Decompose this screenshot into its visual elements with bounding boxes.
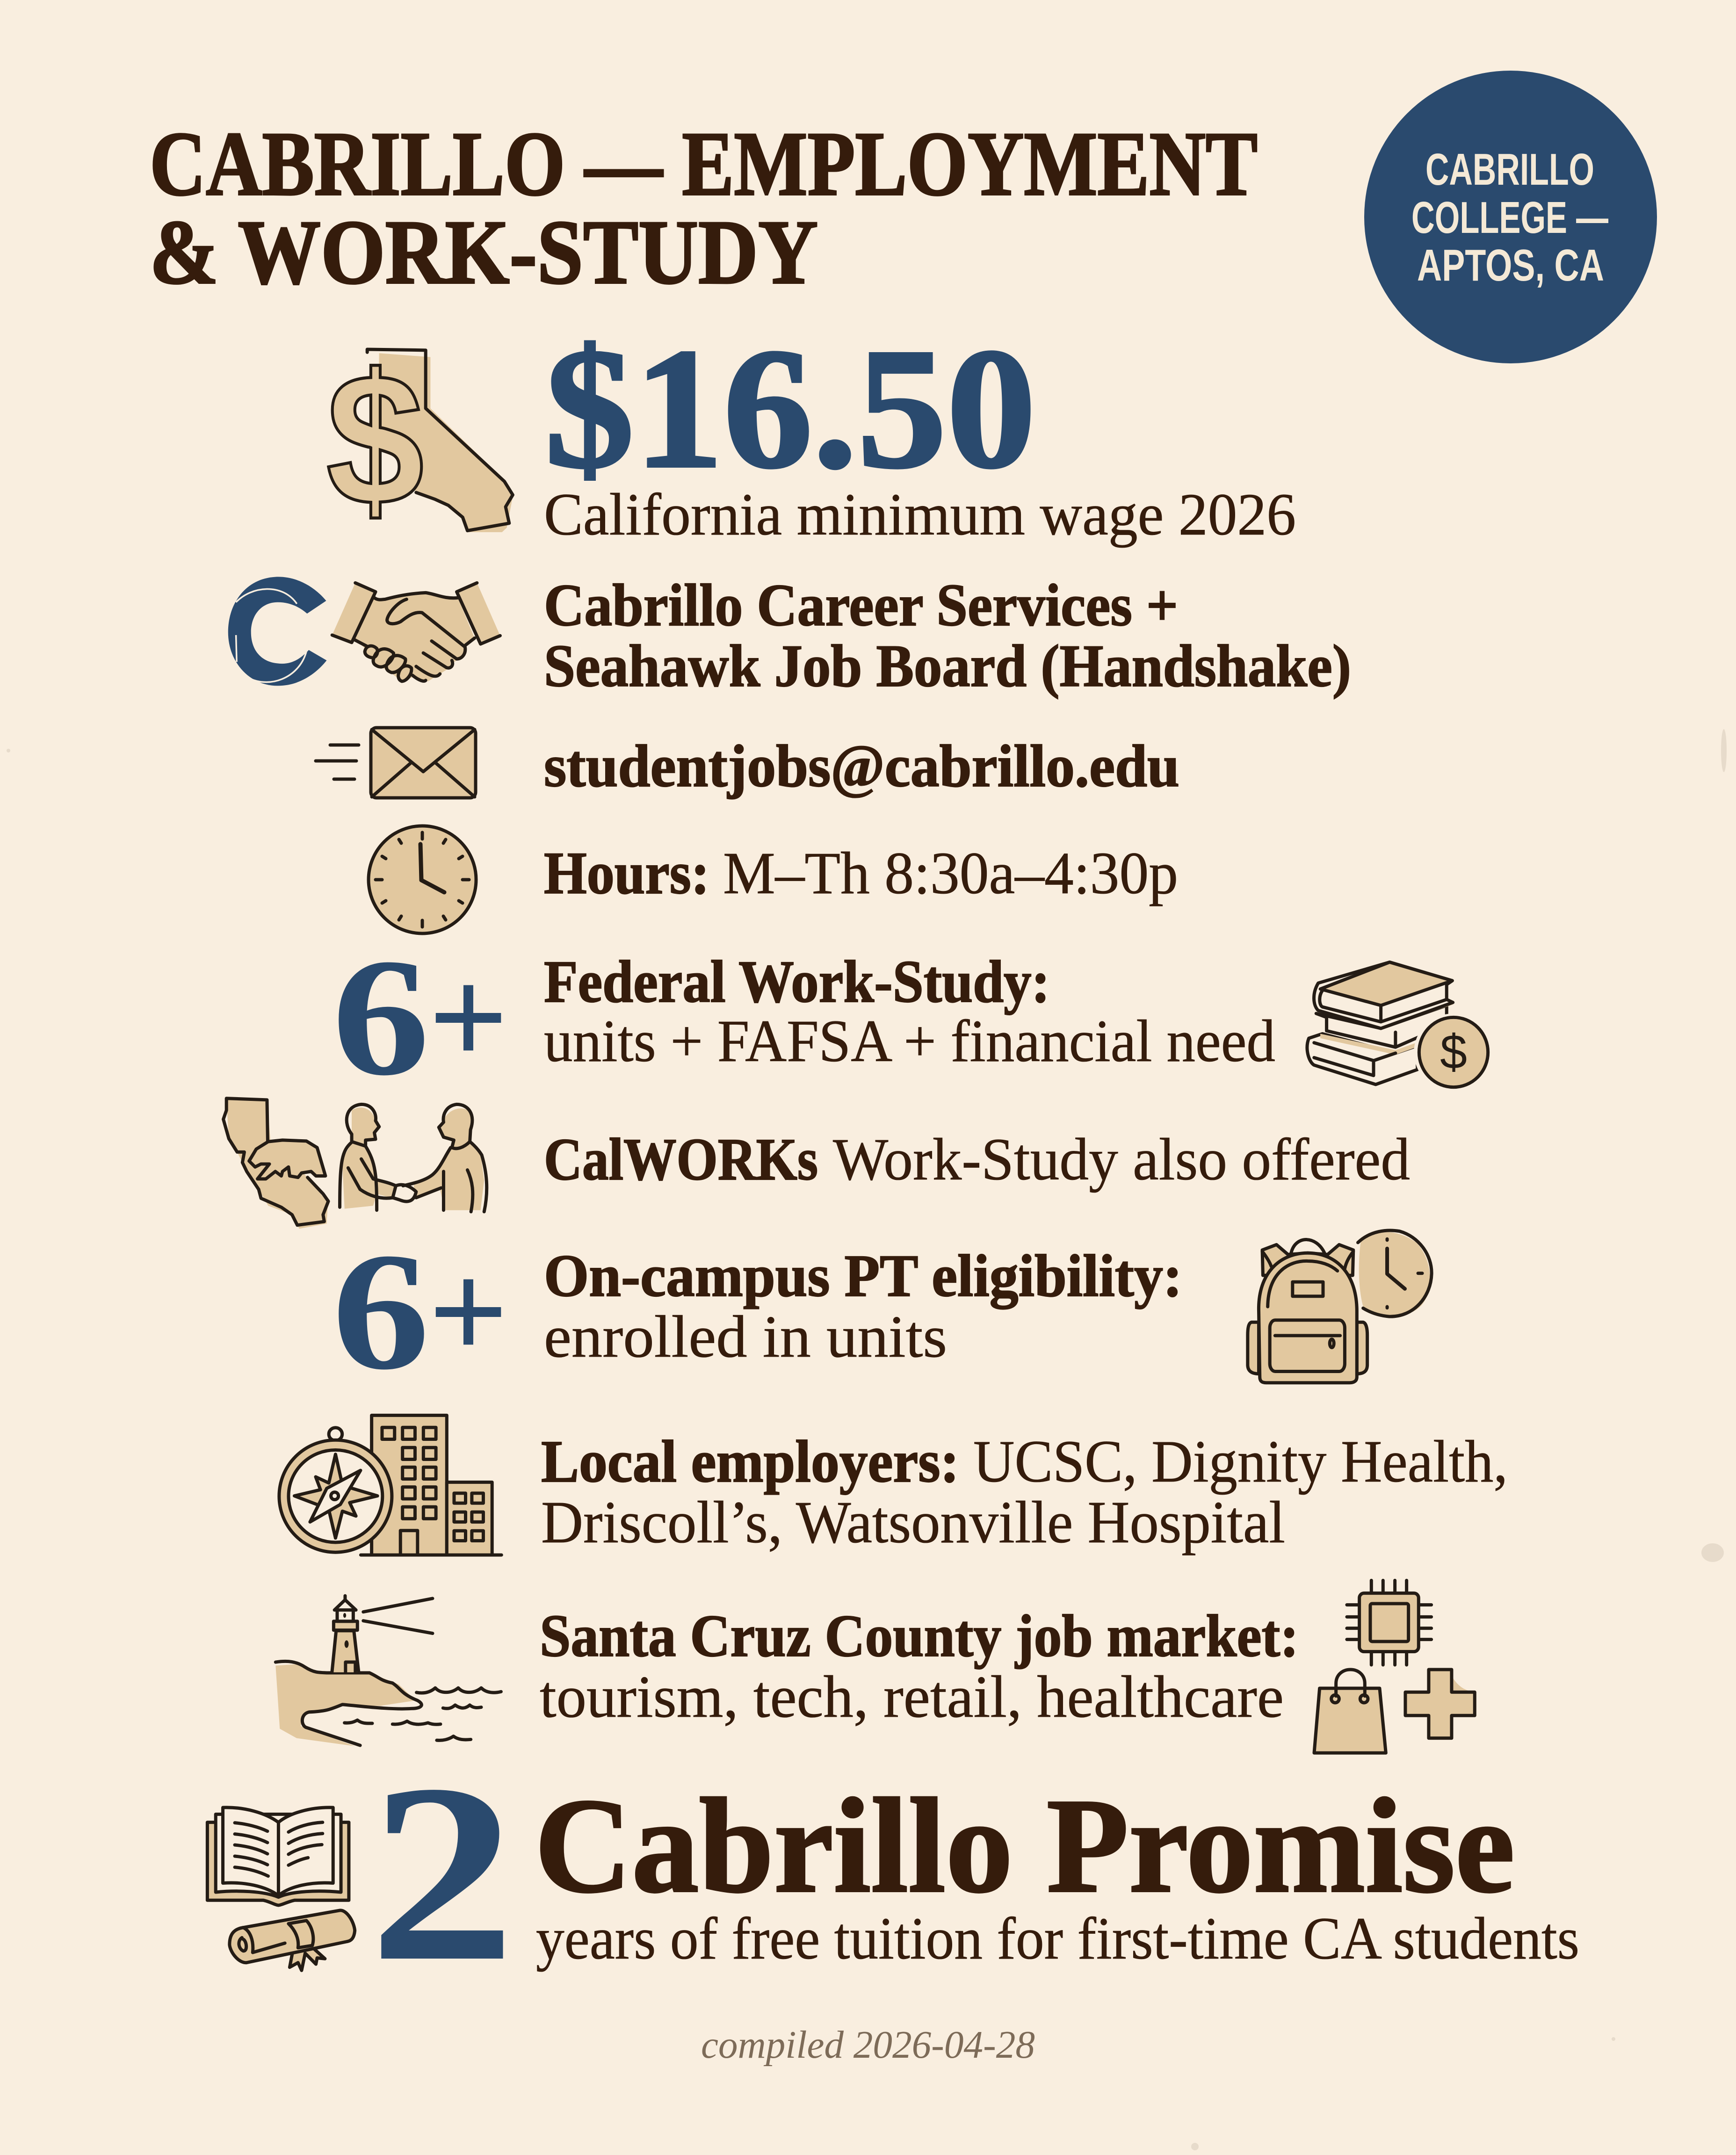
icon: books and coin	[1307, 962, 1493, 1091]
employers text	[541, 1428, 1508, 1555]
figure: 2 years: 2	[369, 1732, 515, 2014]
icon: handshake	[332, 583, 500, 681]
career services text	[544, 572, 1351, 699]
job market text	[540, 1603, 1299, 1730]
figure: 6+ units: +	[428, 940, 508, 1095]
employers text: Driscoll’s, Watsonville Hospital	[541, 1489, 1285, 1555]
footer: compiled date: compiled 2026-04-28	[701, 2023, 1035, 2067]
row: hours	[369, 826, 1178, 933]
figure: 6+ units: 6	[332, 1219, 430, 1404]
title: & WORK-STUDY	[150, 202, 818, 303]
email address: studentjobs@cabrillo.edu	[544, 733, 1179, 799]
career services text: Cabrillo Career Services +	[544, 572, 1178, 638]
employers text: Local employers:	[541, 1428, 959, 1495]
promise caption: years of free tuition for first-time CA students	[536, 1905, 1579, 1972]
eligibility text: enrolled in units	[544, 1303, 947, 1370]
icon: backpack and clock	[1248, 1230, 1432, 1383]
figure: 6+ units	[332, 1219, 508, 1404]
icon: diploma scroll	[230, 1910, 355, 1970]
promise heading: Cabrillo Promise	[535, 1771, 1515, 1921]
icon: shopping bag	[1314, 1670, 1386, 1753]
row: on-campus part-time eligibility	[332, 1219, 1432, 1404]
icon: dollar sign over California: $	[326, 335, 424, 544]
row: Santa Cruz County job market	[275, 1580, 1475, 1753]
icon: clock	[369, 826, 476, 933]
row: CalWORKs	[224, 1099, 1410, 1229]
badge: Cabrillo College, Aptos CA	[1364, 71, 1657, 363]
career services text: Seahawk Job Board (Handshake)	[544, 633, 1351, 699]
federal work-study text	[544, 948, 1275, 1074]
employers text: UCSC, Dignity Health,	[973, 1428, 1508, 1495]
figure: 6+ units: +	[428, 1234, 508, 1389]
icon: books and coin: $	[1440, 1025, 1467, 1079]
row: federal work-study	[332, 925, 1493, 1110]
badge: Cabrillo College, Aptos CA: CABRILLO	[1425, 145, 1594, 195]
eligibility text	[544, 1243, 1182, 1370]
row: career services	[228, 572, 1351, 699]
icon: lighthouse on a coast	[275, 1596, 501, 1746]
title	[150, 113, 1258, 303]
icon: microchip	[1347, 1580, 1432, 1665]
badge: Cabrillo College, Aptos CA: APTOS, CA	[1417, 240, 1604, 290]
title: CABRILLO — EMPLOYMENT	[150, 113, 1258, 215]
icon: two people shaking hands	[340, 1104, 487, 1212]
badge: Cabrillo College, Aptos CA: COLLEGE —	[1411, 193, 1608, 243]
eligibility text: On-campus PT eligibility:	[544, 1243, 1182, 1309]
row: local employers	[279, 1415, 1508, 1555]
figure: 6+ units: 6	[332, 925, 430, 1110]
hours text: Hours:	[544, 840, 709, 906]
row: minimum wage	[326, 313, 1296, 548]
hours text: M–Th 8:30a–4:30p	[723, 840, 1178, 906]
federal work-study text: units + FAFSA + financial need	[544, 1008, 1275, 1074]
wage figure: $16.50	[545, 313, 1036, 504]
CalWORKs text: Work-Study also offered	[833, 1126, 1410, 1193]
icon: California with bear	[224, 1099, 328, 1229]
icon: medical cross	[1405, 1670, 1475, 1738]
job market text: Santa Cruz County job market:	[540, 1603, 1299, 1669]
icon: envelope with speed lines	[316, 728, 476, 798]
row: Cabrillo Promise	[207, 1732, 1579, 2014]
icon: compass	[279, 1428, 392, 1552]
icon: Cabrillo C logo	[228, 577, 326, 686]
CalWORKs text	[544, 1126, 1410, 1193]
job market text: tourism, tech, retail, healthcare	[540, 1663, 1284, 1730]
icon: open book	[207, 1808, 349, 1905]
wage caption: California minimum wage 2026	[544, 481, 1296, 548]
row: email	[316, 728, 1179, 799]
icon: dollar sign over California	[326, 335, 513, 544]
icon: buildings	[361, 1415, 501, 1555]
federal work-study text: Federal Work-Study:	[544, 948, 1050, 1015]
CalWORKs text: CalWORKs	[544, 1126, 818, 1193]
figure: 6+ units	[332, 925, 508, 1110]
